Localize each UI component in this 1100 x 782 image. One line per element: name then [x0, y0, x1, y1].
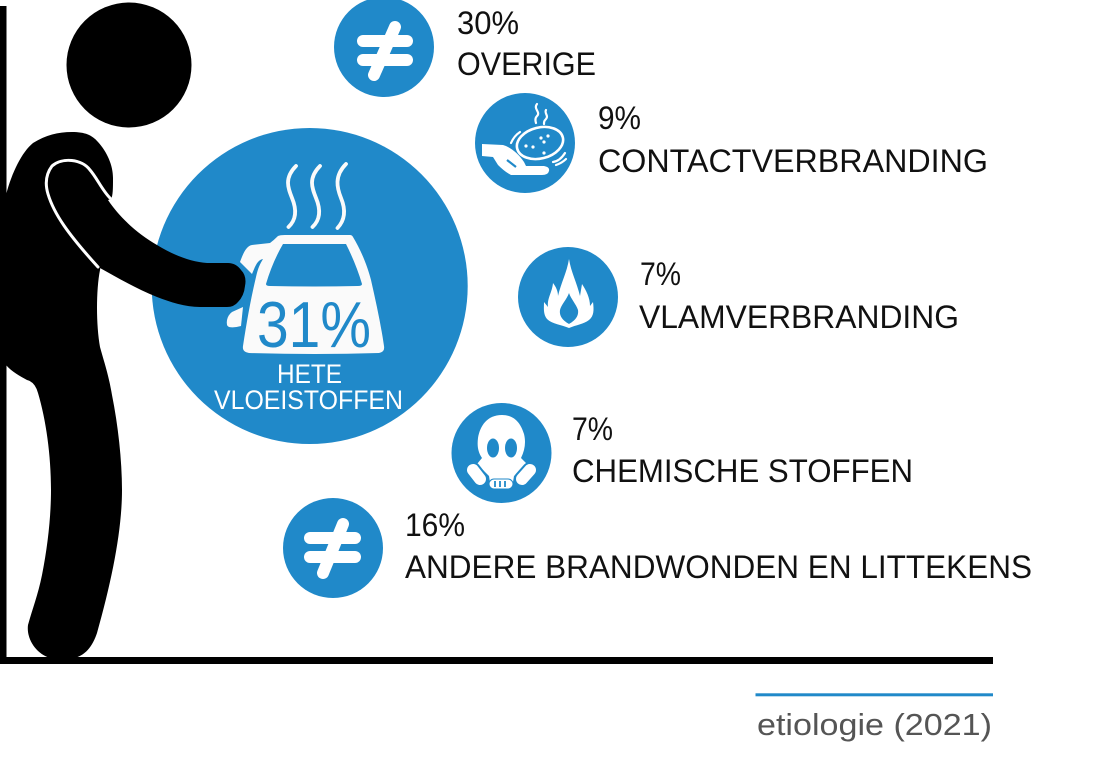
source caption: etiologie (2021) — [756, 693, 993, 742]
text: 16% andere brandwonden en littekens: ANDERE BRANDWONDEN EN LITTEKENS — [405, 549, 1032, 585]
text: 7% vlamverbranding — [639, 256, 959, 335]
item: andere brandwonden en littekens 16% — [283, 498, 1032, 598]
icon: hand with hot object — [475, 93, 575, 193]
label: hete vloeistoffen: HETE — [277, 359, 342, 389]
floor — [0, 657, 993, 664]
text: 16% andere brandwonden en littekens: 16% — [405, 507, 465, 543]
item: overige 30% — [334, 0, 596, 97]
icon: flame — [518, 247, 618, 347]
text: 7% chemische stoffen: 7% — [572, 411, 613, 447]
icon: not equal — [334, 0, 434, 97]
label: hete vloeistoffen — [214, 359, 403, 415]
label: hete vloeistoffen: VLOEISTOFFEN — [214, 385, 403, 415]
text: 7% chemische stoffen — [572, 411, 913, 489]
item: vlamverbranding 7% — [518, 247, 959, 347]
big circle: hot liquids 31% — [152, 128, 468, 444]
text: 7% chemische stoffen: CHEMISCHE STOFFEN — [572, 453, 913, 489]
text: 9% contactverbranding: CONTACTVERBRANDING — [598, 143, 988, 179]
text: 9% contactverbranding: 9% — [598, 100, 641, 136]
head — [66, 2, 192, 128]
text: 16% andere brandwonden en littekens — [405, 507, 1032, 585]
text: 7% vlamverbranding: VLAMVERBRANDING — [639, 299, 959, 335]
icon: gas mask — [452, 403, 552, 503]
value: 31%: 31% — [257, 288, 371, 361]
wall — [0, 6, 6, 664]
text: 7% vlamverbranding: 7% — [640, 256, 681, 292]
arm — [46, 160, 246, 307]
source caption: etiologie (2021): etiologie (2021) — [757, 707, 992, 742]
arm outline — [46, 160, 110, 267]
icon: steam — [288, 164, 346, 228]
item: chemische stoffen 7% — [452, 403, 913, 503]
body and leg — [6, 132, 122, 659]
icon: kettle — [227, 235, 384, 354]
text: 30% overige: 30% — [457, 5, 519, 41]
text: 30% overige — [457, 5, 596, 82]
icon: kettle spout — [227, 307, 243, 327]
icon: not equal — [283, 498, 383, 598]
person figure — [6, 2, 246, 659]
text: 30% overige: OVERIGE — [457, 46, 596, 82]
item: contactverbranding 9% — [475, 93, 988, 193]
text: 9% contactverbranding — [598, 100, 988, 179]
